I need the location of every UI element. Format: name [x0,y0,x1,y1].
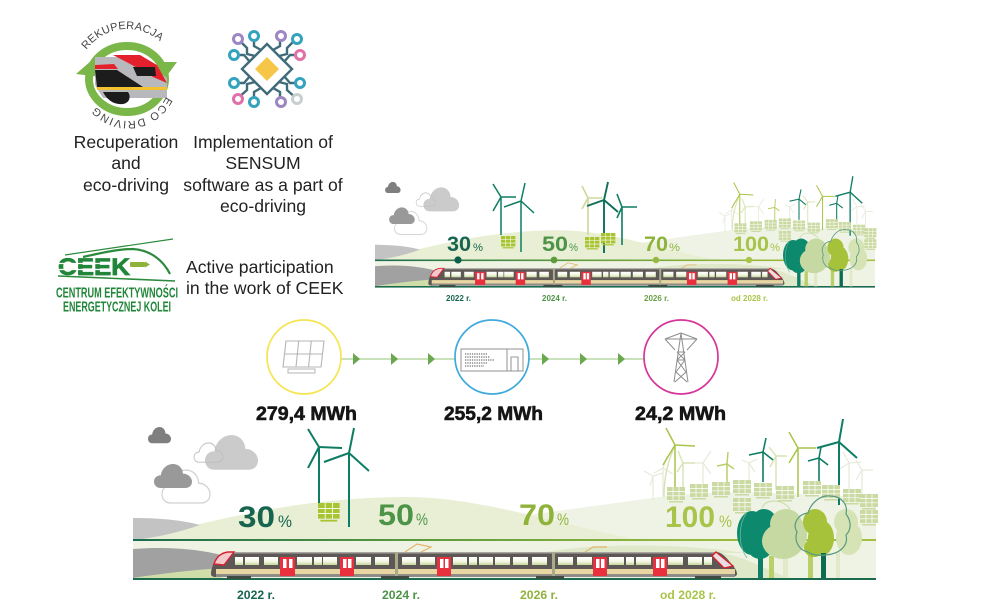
value: 279,4 MWh: 279,4 MWh [256,404,357,425]
percent 100: 100 [665,501,715,534]
logo: CEEK energy efficiency centre [56,239,178,316]
hills background [375,227,875,286]
icon: solar panel [267,320,341,394]
train [428,263,784,287]
logo: CEEK energy efficiency centre: ENERGETYCZNEJ KOLEI [63,298,171,316]
wind turbines 2022 [308,428,369,527]
percent 100: % [719,512,732,531]
percent 50: 50 [378,499,414,532]
text: implementation of SENSUM: eco-driving [220,196,306,216]
percent 50 [542,233,578,256]
text: implementation of SENSUM: Implementation of [193,132,333,152]
percent 30 [238,501,292,534]
flow arrows [353,353,625,365]
wind and solar farm [719,176,876,250]
text: recuperation and eco-driving: eco-driving [83,175,169,195]
percent 30: 30 [238,501,275,534]
text: recuperation and eco-driving: and [111,153,141,173]
percent 30: 30 [447,233,471,256]
panel: small timeline scene [375,176,876,303]
percent 50: % [416,510,428,529]
value: 24,2 MWh: 24,2 MWh [635,404,726,425]
year labels: 2026 r. [644,294,669,303]
clouds [385,182,459,234]
CEEK wordmark: CEEK [58,254,131,281]
icon: SENSUM circuit chip [230,32,304,106]
year labels: 2024 r. [542,294,567,303]
train front [95,55,167,104]
value: 255,2 MWh: 255,2 MWh [444,404,543,425]
solar panel 2022 [318,503,340,522]
percent 50: 50 [542,233,568,256]
icon: inverter [455,320,529,394]
trees [783,230,867,286]
text: active participation in CEEK: in the work of CEEK [186,278,344,298]
percent 50: % [569,242,578,254]
year labels: 2022 r. [237,588,275,602]
text: recuperation and eco-driving: Recuperation [74,132,178,152]
clouds [148,427,258,503]
logo ring text: ECO DRIVING [92,98,172,128]
year labels: od 2028 r. [660,588,716,602]
wind turbines 2024 [582,182,637,253]
panel: energy flow [256,320,726,425]
hills background [133,493,876,578]
wind and solar farm [644,419,878,526]
percent 70 [644,233,680,256]
text: active participation in CEEK: Active participation [186,257,334,277]
percent 70: 70 [519,499,555,532]
circular green arrows [76,46,177,112]
percent 70: % [669,242,680,254]
percent 30: % [473,242,483,254]
icon: transmission pylon [644,320,718,394]
percent 100: % [770,242,780,254]
connector lines [341,358,644,360]
logo ring text: REKUPERACJA [81,21,162,50]
percent 70 [519,499,569,532]
percent 30 [447,233,483,256]
CEEK name: CENTRUM EFEKTYWNOŚCI [56,284,178,302]
year labels [446,294,768,303]
year labels [237,588,716,602]
year labels: 2026 r. [520,588,558,602]
tracks [375,260,875,288]
solar panels 2024 [585,233,615,249]
percent 100: 100 [733,233,769,256]
percent 50 [378,499,428,532]
wind turbines 2022 [493,183,534,252]
icon: recuperation and eco-driving logo [76,21,177,128]
text: implementation of SENSUM: SENSUM [225,153,301,173]
train [211,544,737,579]
percent 30: % [278,512,292,531]
tracks [133,539,876,580]
trees [737,496,862,578]
year labels: 2024 r. [382,588,420,602]
year labels: od 2028 r. [731,294,768,303]
year labels: 2022 r. [446,294,471,303]
timeline points [454,256,752,264]
logo ring text [81,21,172,128]
text: implementation of SENSUM: software as a part of [183,175,343,195]
percent 70: 70 [644,233,668,256]
panel: large timeline scene [133,419,878,602]
percent 70: % [557,510,569,529]
solar panel 2022 [501,236,515,248]
